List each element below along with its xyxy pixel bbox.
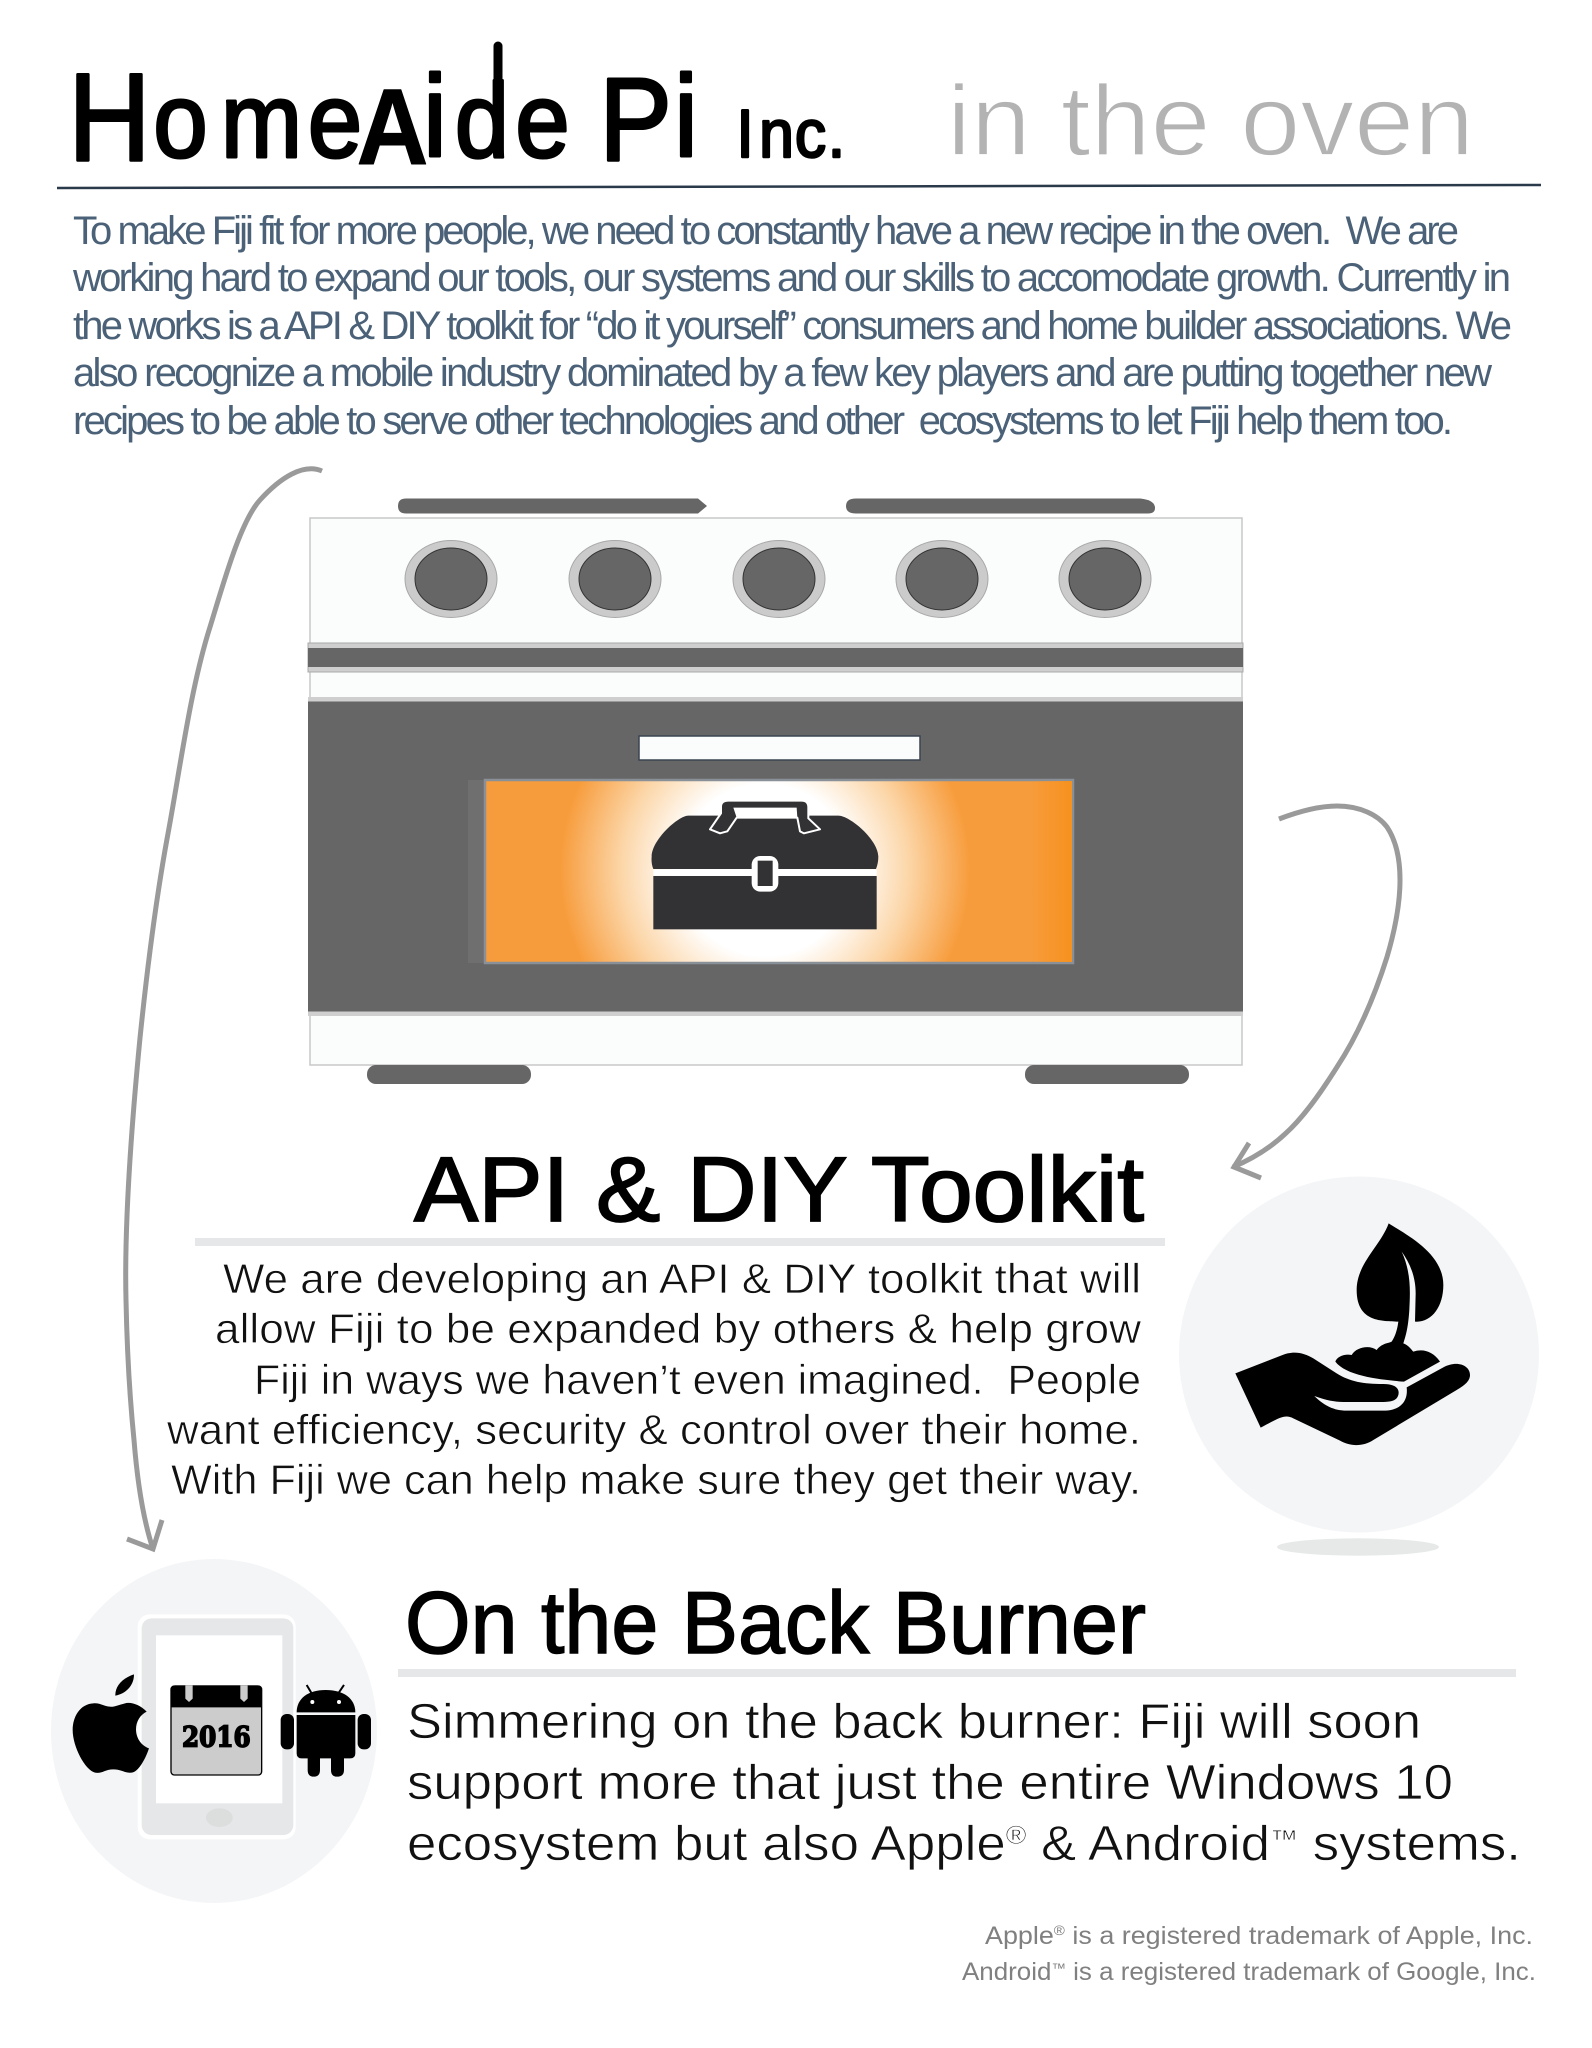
section: On the Back Burner	[398, 1573, 1521, 1871]
oven foot right	[1025, 1065, 1189, 1084]
trademark footnote: Apple	[985, 1922, 1049, 1950]
title: HomeAide Pi Inc.: e	[515, 61, 570, 180]
trademark footnote: is a registered trademark of Google, Inc.	[1066, 1958, 1536, 1986]
body text: We are developing an API & DIY toolkit that will	[223, 1255, 1141, 1302]
body text: Simmering on the back burner: Fiji will soon	[407, 1695, 1421, 1749]
title: HomeAide Pi Inc.: H	[68, 49, 151, 187]
intro paragraph	[72, 209, 1512, 443]
title: HomeAide Pi Inc.: i	[674, 51, 698, 181]
back burner right	[846, 498, 1155, 514]
arrow: from oven to toolkit	[1233, 806, 1400, 1178]
title: HomeAide Pi Inc.: A	[357, 66, 428, 187]
trademark footnote: ™	[1051, 1960, 1066, 1976]
intro paragraph: the works is a API & DIY toolkit for “do it yourself” consumers and home builder associations. We	[73, 304, 1512, 348]
title: HomeAide Pi Inc.: m	[221, 61, 302, 180]
body text: allow Fiji to be expanded by others & help grow	[215, 1305, 1142, 1352]
body text: support more that just the entire Windows 10	[407, 1756, 1453, 1810]
intro paragraph: also recognize a mobile industry dominated by a few key players and are putting together new	[73, 351, 1492, 395]
oven body	[310, 518, 1242, 1065]
title: HomeAide Pi Inc.: P	[599, 54, 672, 186]
title: HomeAide Pi Inc.: n	[759, 96, 794, 172]
back burner left	[398, 498, 707, 514]
icon: toolbox	[652, 801, 878, 929]
door handle	[639, 736, 920, 760]
heading: API & DIY Toolkit	[414, 1139, 1144, 1241]
intro paragraph: To make Fiji fit for more people, we need to constantly have a new recipe in the oven. We are	[73, 209, 1459, 253]
oven window with glow	[485, 780, 1073, 963]
calendar 2016	[171, 1685, 262, 1775]
tablet	[138, 1614, 296, 1839]
body text: ®	[1006, 1820, 1026, 1850]
title: HomeAide Pi Inc.: c	[795, 96, 826, 172]
subtitle: in the oven: in the oven	[947, 65, 1474, 177]
title: HomeAide Pi Inc.: e	[308, 61, 362, 180]
trademark footnote: ®	[1054, 1922, 1066, 1938]
icon: hand holding seedling	[1179, 1176, 1539, 1556]
trademark footnote: Android	[962, 1958, 1048, 1986]
oven illustration	[308, 498, 1243, 1084]
trademark footnote	[962, 1922, 1536, 1986]
title: HomeAide Pi Inc.: I	[736, 96, 754, 172]
body text: ™	[1270, 1824, 1298, 1854]
cooktop band	[308, 643, 1243, 672]
trademark footnote: is a registered trademark of Apple, Inc.	[1065, 1922, 1533, 1950]
intro paragraph: recipes to be able to serve other technologies and other ecosystems to let Fiji help them too.	[73, 399, 1453, 443]
icon: tablet with apple, calendar and android	[51, 1559, 377, 1903]
body text	[166, 1255, 1142, 1503]
body text: systems.	[1298, 1817, 1521, 1871]
title: HomeAide Pi Inc.: d	[455, 61, 509, 180]
android logo	[281, 1685, 371, 1777]
oven door	[308, 697, 1243, 1016]
title: HomeAide Pi Inc.: .	[828, 96, 845, 172]
header	[68, 46, 1474, 187]
title: HomeAide Pi Inc.: o	[153, 61, 208, 180]
body text: With Fiji we can help make sure they get their way.	[171, 1456, 1141, 1503]
intro paragraph: working hard to expand our tools, our systems and our skills to accomodate growth. Currently in	[72, 256, 1511, 300]
body text: want efficiency, security & control over their home.	[166, 1406, 1141, 1453]
body text	[407, 1695, 1521, 1871]
heading: On the Back Burner	[405, 1573, 1146, 1672]
apple logo	[73, 1674, 149, 1773]
title: HomeAide Pi Inc.: i	[423, 51, 447, 181]
body text: & Android	[1026, 1817, 1270, 1871]
control knobs	[405, 540, 1151, 618]
body text: ecosystem but also Apple	[407, 1817, 963, 1871]
body text: Fiji in ways we haven’t even imagined. People	[254, 1356, 1141, 1403]
calendar 2016: 2016	[182, 1721, 251, 1754]
section: API & DIY Toolkit	[166, 1139, 1165, 1503]
title: HomeAide Pi Inc.	[68, 46, 845, 187]
oven foot left	[367, 1065, 531, 1084]
arrow: from intro down to back burner	[126, 469, 322, 1549]
